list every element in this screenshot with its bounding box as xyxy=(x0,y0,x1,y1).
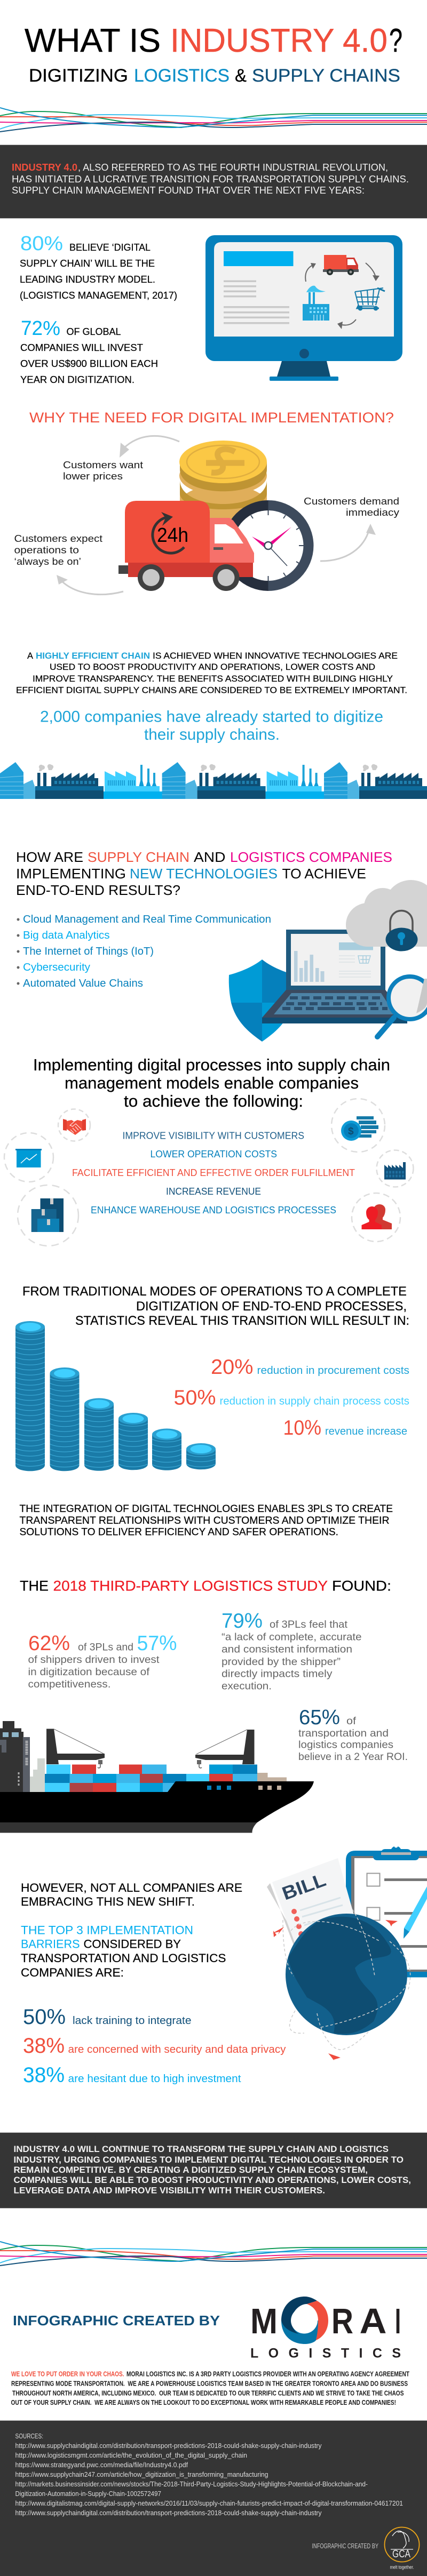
stat: 80 percent: BELIEVE ‘DIGITAL xyxy=(69,242,151,253)
logo: Morai Logistics: M xyxy=(250,2301,278,2341)
stat: 79 percent: provided by the shipper” xyxy=(222,1656,341,1668)
stat: 79 percent: execution. xyxy=(222,1680,272,1692)
stat: 62 and 57 percent: in digitization because of xyxy=(28,1666,150,1678)
stat: 62 and 57 percent: competitiveness. xyxy=(28,1678,111,1690)
stat: 62 and 57 percent: 57% xyxy=(137,1632,177,1655)
list: sources: https://www.strategyand.pwc.com/media/file/Industry4.0.pdf xyxy=(15,2461,188,2469)
heading: implementing digital processes: Implementing digital processes into supply chain xyxy=(33,1055,390,1074)
stat: 79 percent: and consistent information xyxy=(222,1644,352,1655)
icon: warehouse boxes xyxy=(18,1185,78,1246)
heading: 2018 third-party logistics study: 2018 THIRD-PARTY LOGISTICS STUDY xyxy=(53,1578,328,1594)
subtitle: SUPPLY CHAINS xyxy=(252,66,400,86)
panel: intro dark band: SUPPLY CHAIN MANAGEMENT FOUND THAT OVER THE NEXT FIVE YEARS: xyxy=(12,185,365,196)
subtitle: & xyxy=(235,66,247,86)
stat: 80 percent: LEADING INDUSTRY MODEL. xyxy=(20,274,155,285)
list: technologies xyxy=(17,914,271,989)
credit: GCA: GCA xyxy=(392,2548,411,2560)
list: sources: http://www.supplychaindigital.com/distribution/transport-predictions-2018-could-shake-supply-chain-industry xyxy=(15,2509,322,2517)
stat: 72 percent xyxy=(20,317,158,385)
list: sources: http://www.logisticsmgmt.com/article/the_evolution_of_the_digital_supply_chain xyxy=(15,2451,247,2459)
stat: 65 percent: transportation and xyxy=(298,1727,389,1739)
title: ? xyxy=(389,22,402,59)
stat: 10 percent xyxy=(283,1417,407,1439)
icon: factory skyline xyxy=(0,762,427,799)
list: sources: http://www.supplychaindigital.com/distribution/transport-predictions-2018-could-shake-supply-chain-industry xyxy=(15,2442,322,2450)
callout: 2,000 companies: their supply chains. xyxy=(144,726,280,743)
callout: 2,000 companies: 2,000 companies have already started to digitize xyxy=(40,708,383,725)
text block: highly efficient chain: IMPROVE TRANSPARENCY. THE BENEFITS ASSOCIATED WITH BUILDING HIGHLY xyxy=(33,674,393,684)
icon: desktop monitor with supply cycle xyxy=(205,235,402,381)
panel: conclusion dark band xyxy=(0,2132,427,2209)
receipt xyxy=(267,1858,354,1952)
label: customers demand immediacy: Customers demand xyxy=(304,495,399,507)
list: achievements xyxy=(72,1131,355,1215)
title xyxy=(25,22,402,59)
label: customers demand immediacy xyxy=(304,495,400,518)
text block: integration of digital technologies: SOLUTIONS TO DELIVER EFFICIENCY AND SAFER OPERATIONS. xyxy=(19,1526,338,1538)
list: sources: SOURCES: xyxy=(15,2432,43,2440)
stat: 72 percent: 72% xyxy=(21,317,60,340)
list: achievements: ENHANCE WAREHOUSE AND LOGISTICS PROCESSES xyxy=(91,1205,336,1215)
stat: 50 percent lack training: 50% xyxy=(23,2005,66,2029)
coloured ribbon lines lower xyxy=(0,2242,427,2266)
text block: not all companies embracing: EMBRACING THIS NEW SHIFT. xyxy=(21,1895,195,1908)
heading: infographic created by: INFOGRAPHIC CREATED BY xyxy=(13,2313,220,2329)
icon: delivery truck with 24h xyxy=(118,501,254,591)
callout: 2,000 companies xyxy=(40,708,383,743)
text block: integration of digital technologies: THE INTEGRATION OF DIGITAL TECHNOLOGIES ENABLES 3PLS TO CREATE xyxy=(19,1503,393,1515)
stat: 50 percent: reduction in supply chain process costs xyxy=(220,1395,409,1407)
text block: highly efficient chain: HIGHLY EFFICIENT CHAIN xyxy=(36,651,150,661)
icon: chart xyxy=(4,1133,53,1182)
text block: not all companies embracing: TRANSPORTATION AND LOGISTICS xyxy=(21,1951,226,1965)
panel: intro dark band: INDUSTRY 4.0 xyxy=(12,162,77,173)
icon: coins xyxy=(331,1099,385,1152)
text block: highly efficient chain: EFFICIENT DIGITAL SUPPLY CHAINS ARE CONSIDERED TO BE EXTREMELY IMPORTANT. xyxy=(16,686,407,695)
icon: factory small xyxy=(377,1150,413,1187)
stat: 20 percent: reduction in procurement costs xyxy=(257,1365,409,1377)
heading: from traditional modes xyxy=(22,1284,409,1328)
panel: conclusion dark band: INDUSTRY, URGING COMPANIES TO IMPLEMENT DIGITAL TECHNOLOGIES IN ORDER TO xyxy=(14,2155,404,2165)
text block: highly efficient chain: IS ACHIEVED WHEN INNOVATIVE TECHNOLOGIES ARE xyxy=(153,651,398,661)
label: customers expect always on: Customers expect xyxy=(14,533,102,544)
stat: 38 percent investment xyxy=(23,2063,241,2087)
icon: coins: $ xyxy=(348,1126,354,1137)
stat: 72 percent: OF GLOBAL xyxy=(66,326,121,337)
cranes xyxy=(46,1729,254,1768)
credit: GCA: INFOGRAPHIC CREATED BY xyxy=(312,2542,378,2550)
title: WHAT IS xyxy=(25,22,161,59)
stat: 50 percent lack training xyxy=(23,2005,191,2029)
panel: conclusion dark band: COMPANIES WILL BE ABLE TO BOOST PRODUCTIVITY AND OPERATIONS, LOWER COSTS, xyxy=(14,2175,411,2185)
stat: 38 percent security: are concerned with security and data privacy xyxy=(68,2044,286,2055)
heading: how are companies implementing: TO ACHIEVE xyxy=(282,866,366,882)
heading: 2018 third-party logistics study: FOUND: xyxy=(332,1578,391,1594)
stat: 38 percent security xyxy=(23,2034,286,2058)
coloured ribbon lines xyxy=(0,108,427,132)
heading: how are companies implementing: AND xyxy=(194,849,225,865)
logo: Morai Logistics: R xyxy=(331,2301,353,2341)
panel: intro dark band: , ALSO REFERRED TO AS THE FOURTH INDUSTRIAL REVOLUTION, xyxy=(78,162,388,173)
stat: 20 percent: 20% xyxy=(211,1356,253,1379)
credit: GCA: melt together. xyxy=(390,2564,414,2571)
list: sources xyxy=(15,2432,403,2517)
text block: not all companies embracing: THE TOP 3 IMPLEMENTATION xyxy=(21,1923,193,1937)
panel: intro dark band xyxy=(0,145,427,219)
stat: 50 percent lack training: lack training to integrate xyxy=(73,2015,191,2027)
stat: 80 percent xyxy=(20,233,177,301)
text block: integration of digital technologies xyxy=(19,1503,393,1538)
stat: 38 percent security: 38% xyxy=(23,2034,65,2058)
title: INDUSTRY 4.0 xyxy=(170,22,388,59)
panel: sources footer xyxy=(0,2420,427,2576)
heading: how are companies implementing: SUPPLY CHAIN xyxy=(88,849,189,865)
list: achievements: LOWER OPERATION COSTS xyxy=(151,1149,277,1159)
panel: conclusion dark band: REMAIN COMPETITIVE. BY CREATING A DIGITIZED SUPPLY CHAIN ECOSYSTEM, xyxy=(14,2165,368,2175)
label: customers want lower prices: Customers want xyxy=(63,459,143,470)
stat: 65 percent: logistics companies xyxy=(298,1739,393,1750)
label: customers expect always on: ‘always be on’ xyxy=(14,556,81,567)
stat: 72 percent: YEAR ON DIGITIZATION. xyxy=(20,374,135,385)
icon: shield, laptop, cloud lock and magnifier xyxy=(229,880,427,1042)
heading: from traditional modes: FROM TRADITIONAL MODES OF OPERATIONS TO A COMPLETE xyxy=(22,1284,407,1299)
containers xyxy=(45,1764,287,1792)
panel: conclusion dark band: LEVERAGE DATA AND IMPROVE VISIBILITY WITH THEIR CUSTOMERS. xyxy=(14,2186,325,2195)
hull xyxy=(0,1781,314,1822)
list: achievements: FACILITATE EFFICIENT AND EFFECTIVE ORDER FULFILLMENT xyxy=(72,1167,355,1178)
arrows: customer demand curves xyxy=(57,436,376,595)
heading: implementing digital processes: to achieve the following: xyxy=(124,1092,303,1110)
list: technologies: Big data Analytics xyxy=(23,930,110,941)
planes xyxy=(272,1920,398,2061)
heading: how are companies implementing xyxy=(16,849,392,898)
credit: GCA xyxy=(312,2527,420,2571)
logo: Morai Logistics: I xyxy=(395,2301,401,2341)
text block: highly efficient chain xyxy=(16,651,407,695)
icon: handshake xyxy=(58,1109,90,1141)
icon: clock xyxy=(223,500,314,591)
panel: intro dark band: HAS INITIATED A LUCRATIVE TRANSITION FOR TRANSPORTATION SUPPLY CHAINS. xyxy=(12,174,409,185)
stat: 38 percent investment: 38% xyxy=(23,2063,65,2087)
stat: 10 percent: 10% xyxy=(283,1417,321,1439)
text block: not all companies embracing: BARRIERS xyxy=(21,1937,80,1951)
stat: 10 percent: revenue increase xyxy=(325,1426,407,1437)
heading: how are companies implementing: HOW ARE xyxy=(16,849,83,865)
stat: 72 percent: OVER US$900 BILLION EACH xyxy=(20,358,158,369)
stat: 80 percent: (LOGISTICS MANAGEMENT, 2017) xyxy=(20,290,177,301)
stat: 62 and 57 percent: 62% xyxy=(28,1632,70,1655)
stat: 65 percent: of xyxy=(346,1715,357,1727)
heading: how are companies implementing: IMPLEMENTING xyxy=(16,866,126,882)
heading: how are companies implementing: NEW TECHNOLOGIES xyxy=(130,866,278,882)
receipt: BILL xyxy=(279,1869,329,1905)
text block: about Morai xyxy=(11,2370,409,2406)
label: customers want lower prices xyxy=(63,459,143,482)
chart: descending coin stacks xyxy=(15,1321,216,1471)
stat: 72 percent: COMPANIES WILL INVEST xyxy=(20,342,143,353)
stat: 38 percent investment: are hesitant due to high investment xyxy=(68,2073,241,2085)
list: technologies: Cybersecurity xyxy=(23,962,90,973)
stat: 79 percent: “a lack of complete, accurate xyxy=(222,1631,362,1643)
stat: 65 percent: believe in a 2 Year ROI. xyxy=(298,1751,408,1763)
icon: clipboard, bill, pen and globe xyxy=(267,1844,427,2061)
heading: from traditional modes: STATISTICS REVEAL THIS TRANSITION WILL RESULT IN: xyxy=(75,1314,409,1328)
list: technologies: Cloud Management and Real Time Communication xyxy=(23,914,271,925)
heading: why the need: WHY THE NEED FOR DIGITAL IMPLEMENTATION? xyxy=(29,410,394,426)
stat: 79 percent: directly impacts timely xyxy=(222,1668,333,1680)
heading: 2018 third-party logistics study: THE xyxy=(20,1578,49,1594)
subtitle: DIGITIZING xyxy=(29,66,128,86)
label: customers demand immediacy: immediacy xyxy=(346,507,400,518)
stat: 62 and 57 percent: of 3PLs and xyxy=(78,1642,133,1653)
stat: 79 percent: of 3PLs feel that xyxy=(270,1619,348,1630)
list: sources: Digitization-Automation-in-Supply-Chain-1002572497 xyxy=(15,2490,161,2498)
icon: container ship xyxy=(0,1721,314,1833)
label: customers expect always on xyxy=(14,533,102,567)
heading: from traditional modes: DIGITIZATION OF END-TO-END PROCESSES, xyxy=(136,1299,407,1314)
heading: implementing digital processes xyxy=(33,1055,390,1110)
text block: not all companies embracing: HOWEVER, NOT ALL COMPANIES ARE xyxy=(21,1881,242,1894)
stat: 50 percent: 50% xyxy=(174,1387,216,1409)
logo: Morai Logistics xyxy=(250,2297,401,2361)
icon: coin stack xyxy=(179,441,267,523)
stat: 62 and 57 percent: of shippers driven to invest xyxy=(28,1654,160,1666)
label: customers want lower prices: lower prices xyxy=(63,470,123,482)
list: sources: http://markets.businessinsider.com/news/stocks/The-2018-Third-Party-Logistics-Study-Highlights-Potential-of-Blockchain-and- xyxy=(15,2480,368,2488)
globe xyxy=(283,1909,410,2050)
label: 24h: 24h xyxy=(157,524,188,547)
subtitle xyxy=(29,66,400,86)
logo: Morai Logistics: A xyxy=(360,2301,386,2341)
list: achievements: INCREASE REVENUE xyxy=(166,1186,261,1197)
list: sources: https://www.supplychain247.com/article/how_digitization_is_transforming_manufacturing xyxy=(15,2470,268,2478)
subtitle: LOGISTICS xyxy=(134,66,230,86)
text block: highly efficient chain: A xyxy=(27,651,33,661)
text block: not all companies embracing: CONSIDERED BY xyxy=(83,1937,181,1951)
stat: 65 percent xyxy=(298,1706,408,1763)
list: sources: http://www.digitalistmag.com/digital-supply-networks/2016/11/03/supply-chain-futurists-predict-impact-of-digital-transformation-04617201 xyxy=(15,2499,403,2507)
text block: not all companies embracing xyxy=(21,1881,242,1979)
list: technologies: The Internet of Things (IoT) xyxy=(23,946,154,957)
stat: 79 percent xyxy=(222,1610,362,1692)
text block: not all companies embracing: COMPANIES ARE: xyxy=(21,1966,124,1979)
stat: 62 and 57 percent xyxy=(28,1632,177,1690)
icon: people xyxy=(352,1193,400,1242)
text block: about Morai: WE LOVE TO PUT ORDER IN YOUR CHAOS. xyxy=(11,2370,124,2378)
stat: 80 percent: 80% xyxy=(20,233,63,255)
list: technologies: Automated Value Chains xyxy=(23,978,143,989)
stat: 79 percent: 79% xyxy=(222,1610,263,1633)
heading: implementing digital processes: management models enable companies xyxy=(65,1074,359,1092)
logo: Morai Logistics: LOGISTICS xyxy=(250,2346,401,2361)
stat: 50 percent xyxy=(174,1387,409,1409)
label: customers expect always on: operations to xyxy=(14,544,79,556)
panel: conclusion dark band: INDUSTRY 4.0 WILL CONTINUE TO TRANSFORM THE SUPPLY CHAIN AND LOGISTICS xyxy=(14,2144,389,2154)
stat: 65 percent: 65% xyxy=(299,1706,340,1729)
heading: how are companies implementing: END-TO-END RESULTS? xyxy=(16,882,180,898)
stat: 20 percent xyxy=(211,1356,409,1379)
list: achievements: IMPROVE VISIBILITY WITH CUSTOMERS xyxy=(123,1131,304,1141)
text block: highly efficient chain: USED TO BOOST PRODUCTIVITY AND OPERATIONS, LOWER COSTS AND xyxy=(50,662,375,672)
heading: how are companies implementing: LOGISTICS COMPANIES xyxy=(230,849,392,865)
stat: 80 percent: SUPPLY CHAIN’ WILL BE THE xyxy=(20,258,155,269)
text block: integration of digital technologies: TRANSPARENT RELATIONSHIPS WITH CUSTOMERS AND OPTIMIZE THEIR xyxy=(19,1515,390,1526)
